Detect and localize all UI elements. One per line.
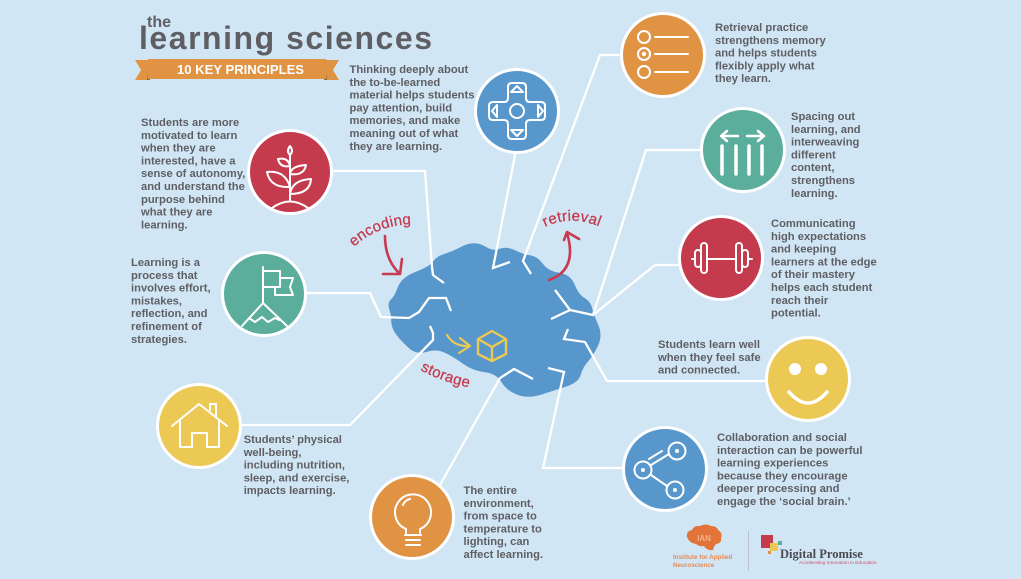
- label: storage: storage: [421, 364, 470, 388]
- arrow: storage: [447, 335, 470, 353]
- logo: Institute for Applied Neuroscience: Institute for Applied: [673, 554, 732, 561]
- text: expectations: and keeping: [771, 244, 836, 256]
- text: motivation: purpose behind: [141, 194, 225, 206]
- text: safety: Students learn well: [658, 339, 760, 351]
- text: spacing: interweaving: [791, 137, 860, 149]
- arrow: retrieval: [549, 232, 579, 280]
- text: safety: and connected.: [658, 365, 740, 377]
- text: expectations: high expectations: [771, 231, 866, 243]
- text: motivation: sense of autonomy,: [141, 168, 245, 180]
- text: deep thinking: Thinking deeply about: [350, 64, 468, 76]
- icon: house: [158, 384, 240, 468]
- text: well-being: impacts learning.: [244, 485, 336, 497]
- text: expectations: Communicating: [771, 218, 856, 230]
- logo: Institute for Applied Neuroscience: [673, 524, 732, 569]
- text: environment: affect learning.: [464, 549, 543, 561]
- text: motivation: motivated to learn: [141, 130, 238, 142]
- text: collaboration: because they encourage: [717, 470, 848, 482]
- text: expectations: learners at the edge: [771, 256, 877, 268]
- logo: Digital Promise: Digital Promise: [780, 547, 863, 561]
- ribbon banner: 10 KEY PRINCIPLES: [177, 62, 304, 77]
- icon: light bulb: [370, 476, 454, 558]
- text: environment: temperature to: [464, 523, 542, 535]
- text: spacing: different: [791, 149, 836, 161]
- text: deep thinking: meaning out of what: [350, 128, 459, 140]
- text: deep thinking: they are learning.: [350, 141, 442, 153]
- text: motivation: when they are: [140, 143, 216, 155]
- text: expectations: of their mastery: [771, 269, 856, 281]
- icon: spacing bars: [702, 108, 784, 192]
- icon: plant: [248, 130, 332, 214]
- text: motivation: interested, have a: [141, 155, 236, 167]
- text: spacing: strengthens: [791, 175, 855, 187]
- text: collaboration: interaction can be powerful: [717, 445, 862, 457]
- icon: smiley: [766, 338, 850, 420]
- text: expectations: reach their: [771, 295, 829, 307]
- brain: [389, 244, 600, 396]
- icon: share nodes: [624, 428, 706, 510]
- text: motivation: and understand the: [141, 181, 245, 193]
- label: retrieval: retrieval: [542, 210, 602, 227]
- text: expectations: helps each student: [771, 282, 873, 294]
- arrow: encoding: [383, 236, 402, 274]
- text: expectations: potential.: [771, 308, 821, 320]
- text: well-being: Students’ physical: [244, 434, 342, 446]
- text: deep thinking: the to-be-learned: [350, 77, 440, 89]
- text: well-being: sleep, and exercise,: [244, 472, 349, 484]
- logo: Institute for Applied Neuroscience: IAN: [697, 534, 711, 543]
- text: deep thinking: pay attention, build: [350, 102, 452, 114]
- logo: Digital Promise: Accelerating Innovation in Education: [799, 560, 877, 566]
- text: effort: strategies.: [131, 334, 187, 346]
- icon: directional pad: [476, 70, 558, 152]
- icon: flag on mountain: [222, 252, 306, 336]
- icon: barbell: [680, 216, 762, 300]
- text: collaboration: Collaboration and social: [717, 432, 847, 444]
- logo: Institute for Applied Neuroscience: Neuroscience: [673, 562, 715, 569]
- logo: Digital Promise: [761, 535, 877, 566]
- text: collaboration: engage the ‘social brain.’: [717, 496, 851, 508]
- divider: [748, 531, 750, 571]
- label: encoding: encoding: [350, 216, 410, 246]
- text: spacing: content,: [791, 162, 835, 174]
- ribbon banner: [135, 59, 339, 80]
- text: well-being: including nutrition,: [244, 460, 345, 472]
- text: environment: lighting, can: [464, 536, 530, 548]
- title: learning sciences: [139, 20, 432, 56]
- text: environment: environment,: [464, 498, 534, 510]
- text: collaboration: learning experiences: [717, 458, 828, 470]
- text: spacing: Spacing out: [791, 111, 855, 123]
- text: effort: reflection, and: [131, 308, 208, 320]
- text: environment: The entire: [464, 485, 517, 497]
- text: retrieval practice: they learn.: [715, 73, 771, 85]
- text: retrieval practice: strengthens memory: [715, 35, 826, 47]
- text: collaboration: deeper processing and: [717, 483, 840, 495]
- text: motivation: what they are: [140, 207, 213, 219]
- text: well-being: well-being,: [243, 447, 302, 459]
- icon: checklist: [622, 14, 704, 96]
- text: safety: when they feel safe: [657, 352, 761, 364]
- text: motivation: learning.: [141, 219, 188, 231]
- text: environment: from space to: [464, 511, 537, 523]
- text: effort: mistakes,: [131, 295, 182, 307]
- text: deep thinking: material helps students: [350, 90, 474, 102]
- text: retrieval practice: Retrieval practice: [715, 22, 808, 34]
- text: retrieval practice: and helps students: [715, 48, 817, 60]
- text: effort: refinement of: [131, 321, 202, 333]
- icon: storage cube: [478, 331, 506, 361]
- connector lines: [240, 55, 767, 485]
- text: spacing: learning, and: [791, 124, 861, 136]
- text: effort: Learning is a: [131, 257, 201, 269]
- text: retrieval practice: flexibly apply what: [715, 60, 815, 72]
- text: effort: process that: [131, 270, 198, 282]
- title: the: [147, 14, 171, 31]
- text: effort: involves effort,: [131, 283, 211, 295]
- text: motivation: Students are more: [141, 117, 239, 129]
- text: spacing: learning.: [791, 188, 838, 200]
- text: deep thinking: memories, and make: [350, 115, 460, 127]
